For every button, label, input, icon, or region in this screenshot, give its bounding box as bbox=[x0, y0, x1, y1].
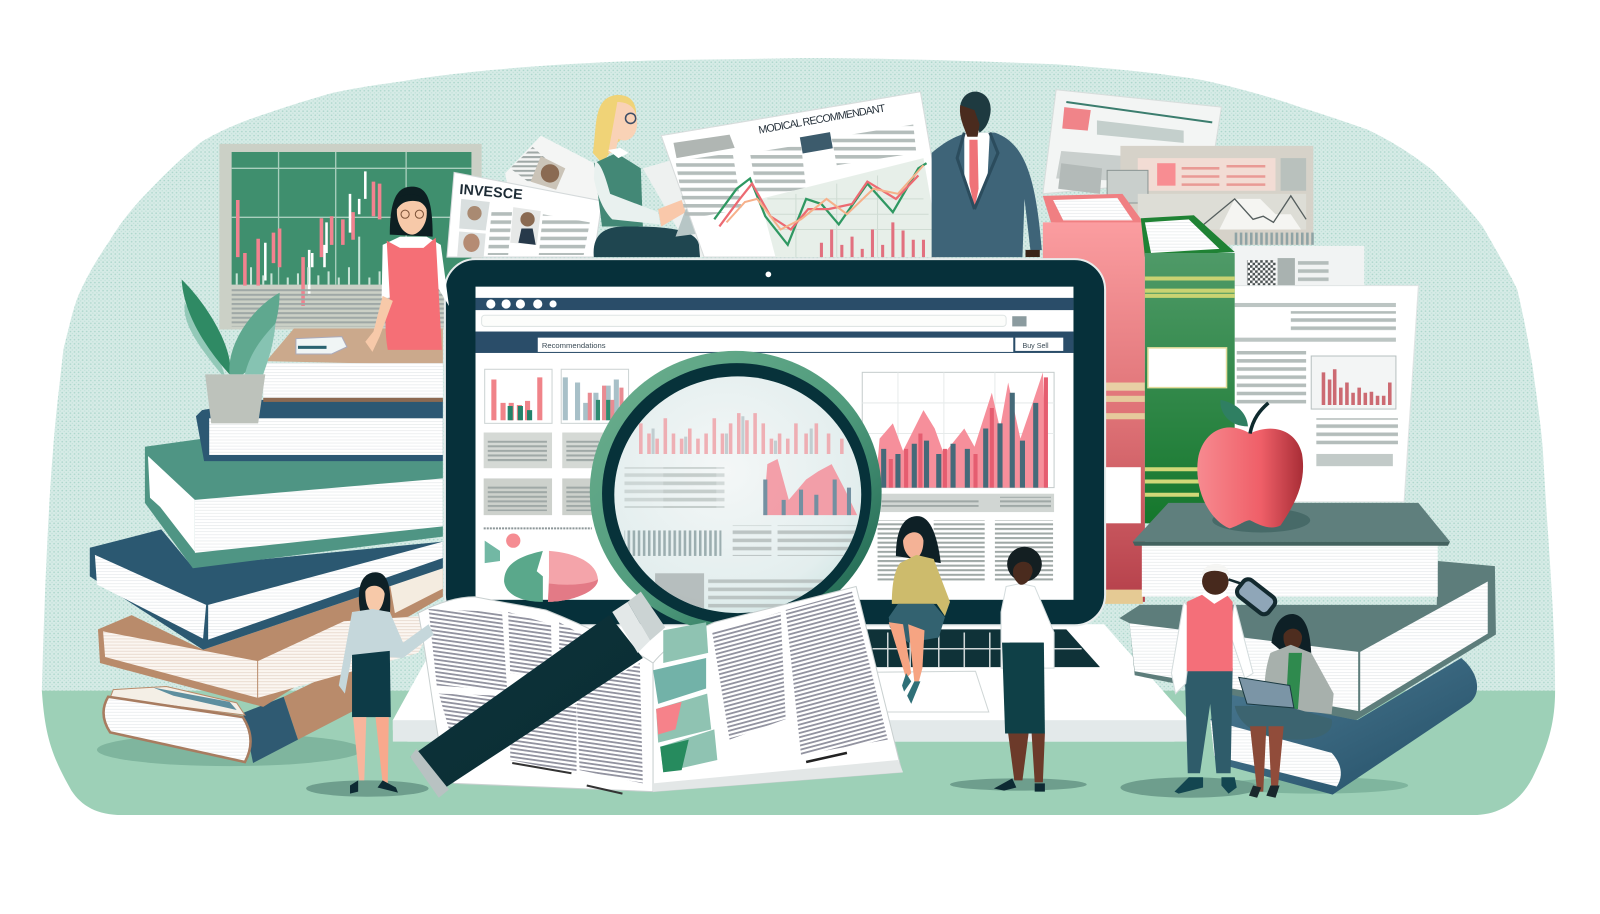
icon: oversized glasses bbox=[1229, 577, 1278, 617]
screen: lower grey strip and text columns bbox=[878, 494, 1054, 581]
magazine: left page text bbox=[429, 609, 643, 794]
panel: green stock chart board bbox=[219, 144, 482, 329]
person: woman standing with grey blouse bbox=[306, 572, 434, 797]
screen: grey info cards bbox=[484, 433, 603, 528]
icon: magnifier handle bbox=[410, 592, 665, 798]
screen: browser chrome: Buy Sell bbox=[1022, 342, 1049, 350]
person: man in suit bbox=[932, 92, 1042, 257]
icon: small box on table bbox=[296, 337, 347, 354]
book: top book with table cover bbox=[263, 328, 443, 402]
paper: INVESCE newspaper: INVESCE bbox=[459, 182, 523, 203]
screen: large area chart bbox=[862, 372, 1054, 488]
floor: green ground band bbox=[42, 691, 1555, 815]
screen: small bar chart one bbox=[485, 369, 552, 423]
icon: dark-bezel laptop bbox=[393, 259, 1189, 742]
person: standing woman with white shirt bbox=[950, 547, 1087, 792]
illustration: research scene with laptop, books and people bbox=[42, 58, 1556, 815]
book: pink upright book bbox=[1043, 194, 1145, 604]
paper: INVESCE newspaper bbox=[447, 172, 602, 257]
person: blonde woman sitting with laptop bbox=[593, 95, 722, 257]
book: navy book bbox=[196, 400, 443, 461]
book: dark blue book bbox=[90, 529, 443, 650]
background blob: dotted mint wall bbox=[42, 58, 1555, 691]
paper: large report sheet with bar chart bbox=[1233, 286, 1418, 502]
person: woman sitting on laptop in mustard sweater bbox=[889, 516, 950, 704]
person: older man with pink vest bbox=[1120, 564, 1278, 798]
magazine: open research journal bbox=[418, 587, 903, 794]
magazine: right page charts bbox=[653, 622, 717, 772]
person: seated woman with laptop bbox=[1235, 614, 1334, 798]
magnifier lens and rim bbox=[590, 351, 882, 632]
icon: red apple bbox=[1197, 400, 1310, 532]
book: right stack middle grey book bbox=[1119, 561, 1496, 720]
screen: browser chrome: Recommendations bbox=[542, 341, 606, 350]
book stack: left pile bbox=[90, 328, 443, 766]
book: green upright book bbox=[1141, 215, 1235, 523]
book: teal book bbox=[145, 439, 443, 568]
person: woman in pink dress at board bbox=[365, 187, 449, 352]
book: bottom book with blue band bbox=[97, 653, 362, 766]
magazine: right page text bbox=[712, 592, 888, 755]
paper: QR code sheet bbox=[1233, 246, 1364, 289]
paper: MODICAL RECOMMENDANT newspaper with line chart bbox=[661, 92, 949, 257]
lens contents: magnified dashboard bbox=[624, 413, 859, 614]
screen: browser chrome bbox=[476, 298, 1073, 353]
book: brown book bbox=[98, 568, 443, 707]
paper: sheet behind main newspaper bbox=[643, 151, 735, 257]
icon: potted plant bbox=[182, 280, 280, 423]
book: right stack top grey book bbox=[1133, 503, 1450, 597]
book: right stack lower blue book bbox=[1210, 658, 1477, 795]
paper: newspaper behind blonde woman bbox=[505, 136, 604, 209]
screen: small bar chart two bbox=[561, 369, 629, 423]
screen: pie chart bbox=[485, 534, 598, 602]
paper: MODICAL RECOMMENDANT newspaper with line chart: MODICAL RECOMMENDANT bbox=[758, 102, 887, 137]
paper: beige chart sheet bbox=[1107, 146, 1314, 245]
paper: top right report bbox=[1043, 90, 1221, 194]
